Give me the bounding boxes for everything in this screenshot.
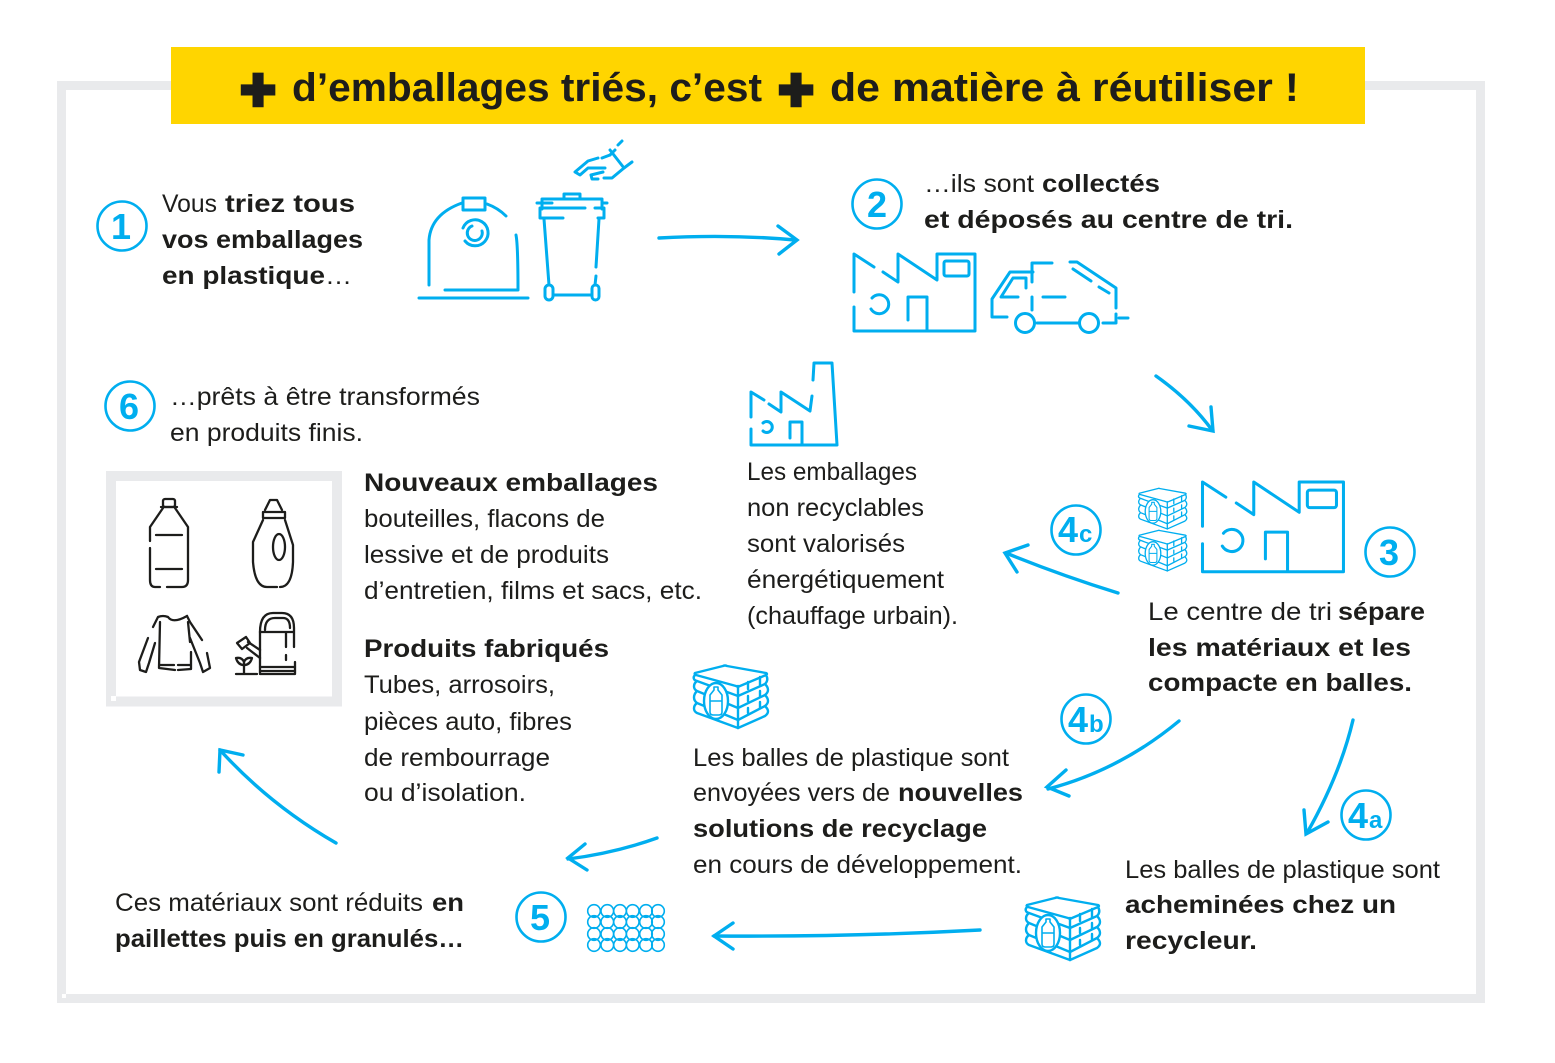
text: produits fabriques xyxy=(364,635,609,807)
step 4b text xyxy=(693,744,1023,879)
step 4a badge: a xyxy=(1369,807,1383,834)
arrow: step 3 to 4b xyxy=(1047,721,1179,796)
title plus sign 1: ✚ xyxy=(240,66,276,117)
step 1 badge xyxy=(98,202,146,250)
title banner xyxy=(171,47,1365,124)
step 4a text xyxy=(1125,856,1440,955)
text: produits fabriques: Tubes, arrosoirs, xyxy=(364,671,555,699)
step 4b text: nouvelles xyxy=(898,779,1023,807)
step 4c text: Les emballages xyxy=(747,458,917,486)
step 5 text: Ces matériaux sont réduits xyxy=(115,889,423,917)
arrow: 4b to step 5 xyxy=(568,838,657,870)
arrow: step 1 to step 2 xyxy=(659,226,797,254)
step 2 text: collectés xyxy=(1042,170,1160,198)
step 2 text: et déposés au centre de tri. xyxy=(924,206,1293,234)
step 4b text: envoyées vers de xyxy=(693,779,890,807)
icon: sorting centre factory xyxy=(854,254,975,331)
arrow: step 5 to step 6 xyxy=(219,750,336,843)
title plus sign 2: ✚ xyxy=(778,66,814,117)
step 4c badge xyxy=(1052,506,1100,554)
outer frame xyxy=(62,86,1480,998)
step 4a text: recycleur. xyxy=(1125,927,1257,955)
arrow: step 2 to step 3 xyxy=(1156,376,1213,431)
text: nouveaux emballages xyxy=(364,469,702,605)
step 3 badge xyxy=(1366,528,1414,576)
step 3 text: compacte en balles. xyxy=(1148,669,1412,697)
step 6 text xyxy=(170,383,480,447)
text: produits fabriques: de rembourrage xyxy=(364,744,550,772)
step 4c text: sont valorisés xyxy=(747,530,905,558)
icon: detergent flask xyxy=(253,500,293,587)
text: nouveaux emballages: bouteilles, flacons de xyxy=(364,505,605,533)
step 1 text: triez tous xyxy=(225,190,355,218)
step 5 text: paillettes puis en granulés… xyxy=(115,925,464,953)
icon: collection truck xyxy=(992,262,1128,332)
icon: sorting factory large xyxy=(1202,482,1343,572)
step 4a text: Les balles de plastique sont xyxy=(1125,856,1440,884)
step 6 text: …prêts à être transformés xyxy=(170,383,480,411)
step 4c text: non recyclables xyxy=(747,494,924,522)
step 6 badge xyxy=(106,382,154,430)
title text part 1: d’emballages triés, c’est xyxy=(292,66,762,110)
step 4b badge xyxy=(1062,694,1110,744)
step 4b text: Les balles de plastique sont xyxy=(693,744,1009,772)
title text part 2: de matière à réutiliser ! xyxy=(830,66,1299,110)
step 4c badge: c xyxy=(1079,521,1092,548)
step 3 text: Le centre de tri xyxy=(1148,598,1332,626)
step 3 text: sépare xyxy=(1338,598,1425,626)
text: produits fabriques: ou d’isolation. xyxy=(364,779,526,807)
step 1 text xyxy=(162,190,363,290)
step 2 badge xyxy=(852,180,902,228)
arrow: step 3 to 4c xyxy=(1005,545,1118,593)
step 4b text: solutions de recyclage xyxy=(693,815,987,843)
step 5 badge xyxy=(516,892,566,942)
icon: granules xyxy=(588,905,664,951)
icon: plastic bale 4a xyxy=(1026,898,1100,960)
panel: finished products xyxy=(111,476,337,702)
step 3 text: les matériaux et les xyxy=(1148,634,1411,662)
step 1 text: vos emballages xyxy=(162,226,363,254)
step 4a badge: 4 xyxy=(1348,795,1368,836)
step 4c text: (chauffage urbain). xyxy=(747,602,958,630)
arrow: 4a to step 5 xyxy=(714,923,980,949)
icon: bottle xyxy=(150,499,188,587)
step 3 badge: 3 xyxy=(1379,532,1399,573)
step 4a badge xyxy=(1342,790,1390,840)
icon: wheelie bin xyxy=(537,194,607,300)
icon: watering can xyxy=(236,613,295,674)
step 2 text: …ils sont xyxy=(924,170,1034,198)
step 4b badge: b xyxy=(1089,711,1104,738)
step 4a text: acheminées chez un xyxy=(1125,891,1396,919)
text: nouveaux emballages: d’entretien, films et sacs, etc. xyxy=(364,577,702,605)
text: nouveaux emballages: lessive et de produits xyxy=(364,541,609,569)
arrow: step 3 to 4a xyxy=(1304,720,1353,834)
step 2 badge: 2 xyxy=(867,184,887,225)
step 5 badge: 5 xyxy=(530,897,550,938)
step 4c text xyxy=(747,458,958,630)
icon: recycling dome xyxy=(419,198,528,298)
step 4c text: énergétiquement xyxy=(747,566,944,594)
icon: plastic bale 4b xyxy=(694,666,768,728)
step 3 text xyxy=(1148,598,1425,697)
step 1 text: … xyxy=(325,262,352,290)
step 1 badge: 1 xyxy=(111,206,131,247)
step 5 text: en xyxy=(432,889,464,917)
icon: sweater xyxy=(139,616,210,672)
step 1 text: Vous xyxy=(162,190,217,218)
text: produits fabriques: Produits fabriqués xyxy=(364,635,609,663)
step 4b text: en cours de développement. xyxy=(693,851,1022,879)
step 2 text xyxy=(924,170,1293,234)
text: produits fabriques: pièces auto, fibres xyxy=(364,708,572,736)
step 6 badge: 6 xyxy=(119,386,139,427)
text: nouveaux emballages: Nouveaux emballages xyxy=(364,469,658,497)
step 4b badge: 4 xyxy=(1068,699,1088,740)
icon: stacked bales xyxy=(1138,488,1187,571)
step 1 text: en plastique xyxy=(162,262,325,290)
icon: non recyclable factory xyxy=(751,363,837,445)
step 6 text: en produits finis. xyxy=(170,419,363,447)
step 5 text xyxy=(115,889,464,953)
step 4c badge: 4 xyxy=(1058,509,1078,550)
icon: hand dropping packaging xyxy=(575,141,632,179)
